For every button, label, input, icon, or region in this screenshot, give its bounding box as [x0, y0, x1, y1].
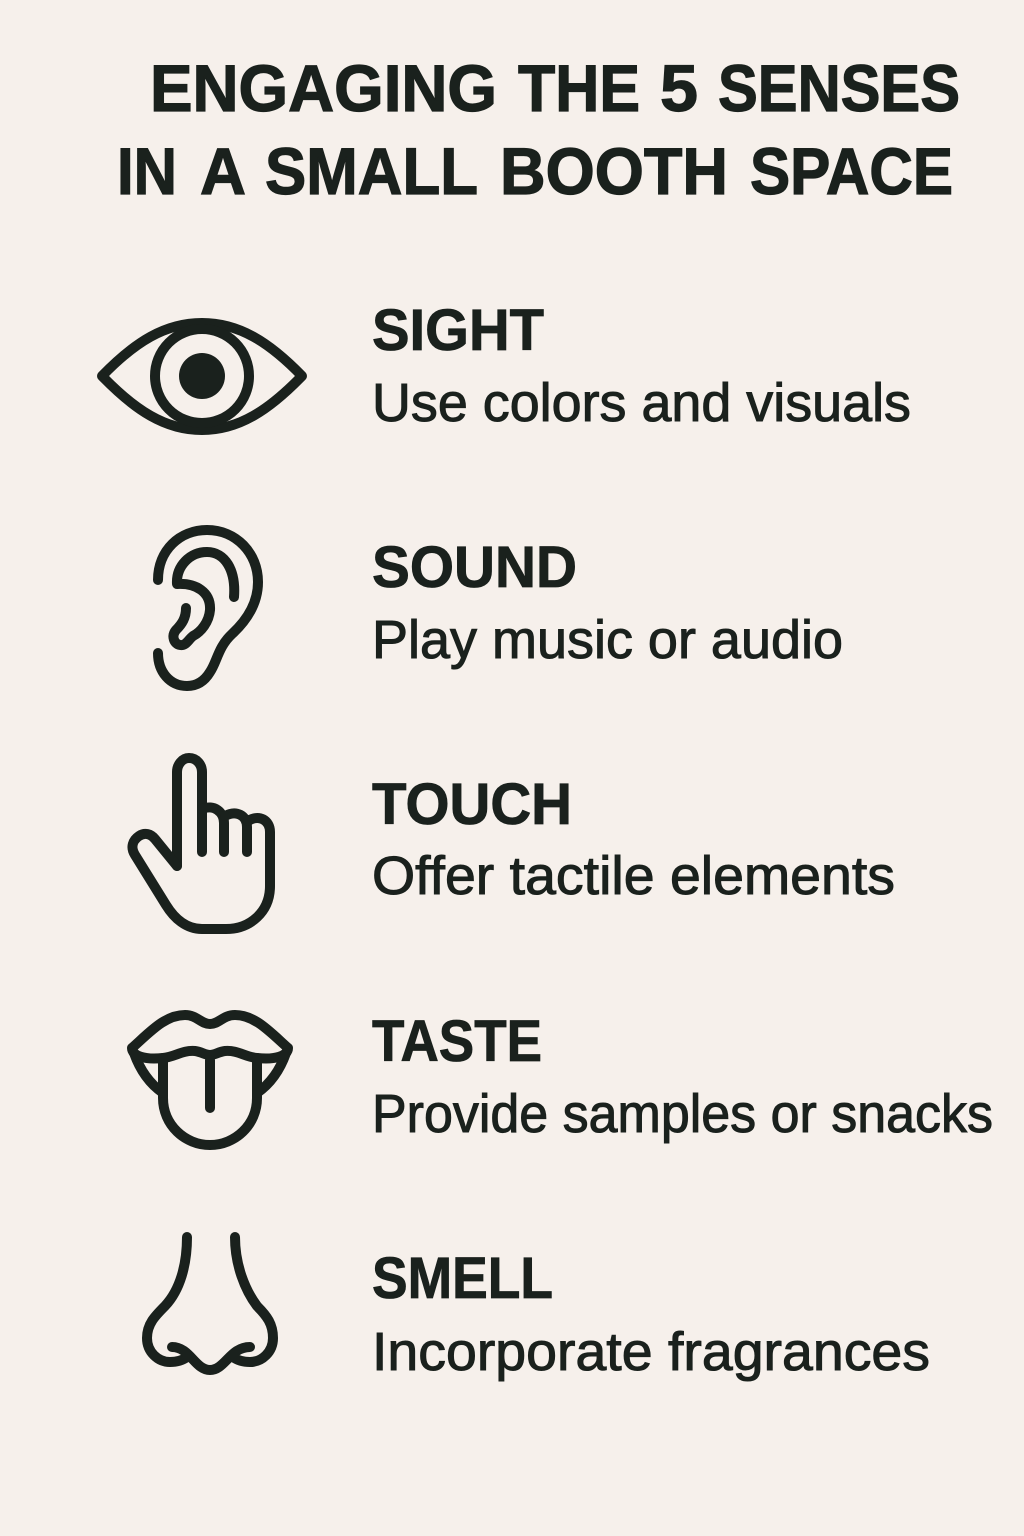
title: IN — [117, 134, 177, 208]
icon: eye — [102, 323, 302, 430]
title: ENGAGING — [150, 51, 497, 125]
heading: taste: TASTE — [372, 1009, 542, 1074]
text: smell description: Incorporate fragrances — [372, 1322, 930, 1382]
title: 5 — [660, 51, 698, 125]
icon: nose — [147, 1237, 273, 1370]
heading: sound: SOUND — [372, 535, 577, 600]
heading: touch: TOUCH — [372, 772, 572, 837]
title — [117, 51, 960, 208]
icon: mouth and tongue — [132, 1015, 288, 1145]
title: SMALL — [265, 134, 478, 208]
icon: hand — [132, 758, 270, 929]
panel: taste — [132, 1009, 993, 1145]
heading: smell: SMELL — [372, 1246, 553, 1311]
panel: sound — [158, 530, 843, 686]
panel: sight — [102, 298, 911, 433]
panel: touch — [132, 758, 895, 929]
text: sound description: Play music or audio — [372, 610, 843, 670]
text: sight description: Use colors and visuals — [372, 373, 911, 433]
title: SPACE — [750, 134, 953, 208]
title: BOOTH — [500, 134, 728, 208]
panel: smell — [147, 1237, 930, 1382]
title: A — [200, 134, 246, 208]
title: SENSES — [718, 51, 960, 125]
text: taste description: Provide samples or snacks — [372, 1084, 993, 1144]
icon: ear — [158, 530, 258, 686]
text: touch description: Offer tactile elements — [372, 846, 895, 906]
title: THE — [518, 51, 640, 125]
heading: sight: SIGHT — [372, 298, 544, 363]
